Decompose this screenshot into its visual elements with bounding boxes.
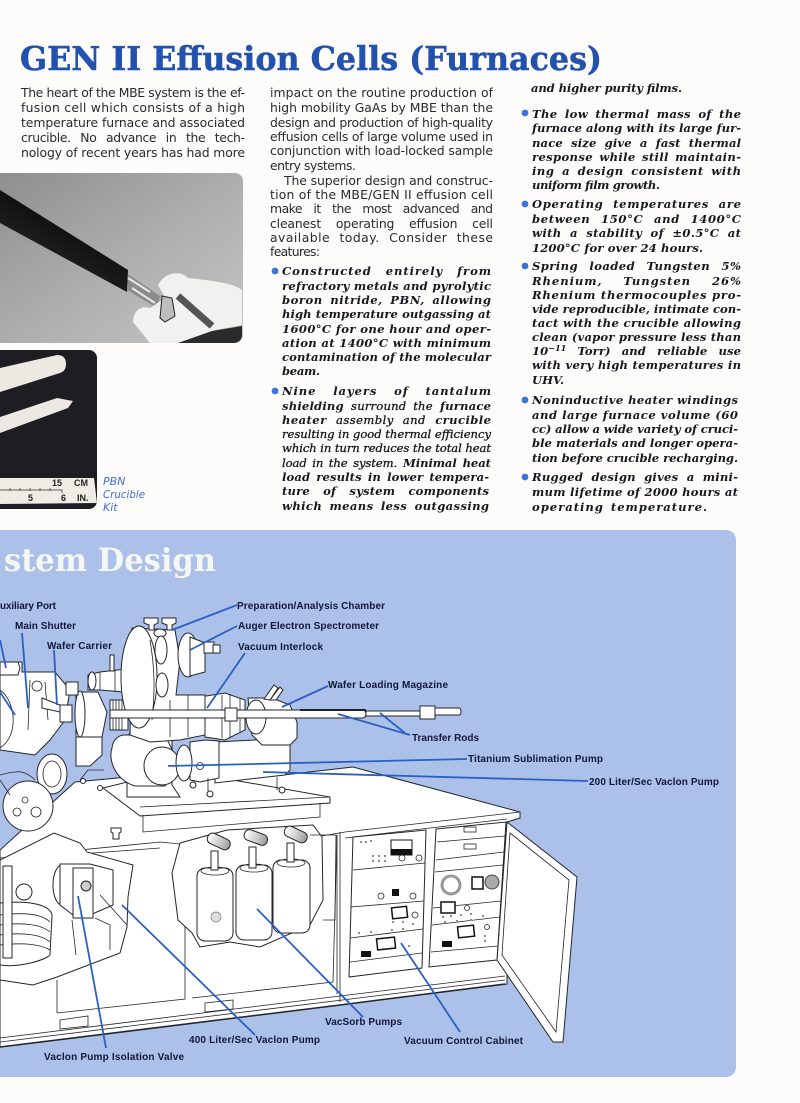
bullet list: column two features: boron nitride, PBN, allowing [282, 293, 491, 307]
text block: column two body: impact on the routine production of [270, 85, 494, 100]
text block: column two body: design and production of high-quality [270, 115, 493, 130]
bullet list: column three features: cc) allow a wide variety of cruci- [532, 422, 738, 436]
bullet list: column two features: load in the system. Minimal heat [282, 456, 492, 470]
interlock section [200, 693, 245, 740]
bullet list: column three features: Operating temperatures are [532, 197, 741, 211]
text block: column two body: The superior design and construc- [283, 173, 493, 188]
bullet list: column two features: load results in lower tempera- [282, 470, 489, 484]
preparation chamber disc [121, 618, 220, 742]
front access panels [57, 835, 337, 1029]
bullet list: column three features: clean (vapor pressure less than [532, 330, 741, 344]
bullet list: column three features: ble materials and longer opera- [532, 436, 738, 450]
text block: column two body: effusion cells of large volume used in [270, 129, 493, 144]
text block: column two body: cleanest operating effusion cell [270, 216, 493, 231]
photo: PBN crucibles with ruler: CM [74, 478, 88, 488]
bullet list: column two features: Constructed entirely from [282, 264, 491, 278]
text block: column two body: entry systems. [270, 158, 356, 173]
text block: introduction [20, 85, 245, 160]
bullet list: column two features: shielding surround the furnace [282, 399, 491, 413]
bullet list: column three features: tion before crucible recharging. [532, 451, 738, 465]
bullet list: column three features: and higher purity films. [531, 81, 682, 95]
bullet list: column three features: nace size give a fast thermal [532, 136, 742, 150]
bullet list: column three features: response while still maintain- [532, 150, 741, 164]
bullet list: column three features: Rugged design gives a mini- [531, 470, 738, 484]
bullet list: column two features: heater assembly and crucible [282, 413, 491, 427]
bullet list: column two features: refractory metals and pyrolytic [282, 279, 491, 293]
callout labels: Titanium Sublimation Pump [468, 754, 603, 765]
callout labels: 200 Liter/Sec Vaclon Pump [589, 777, 719, 788]
photo: PBN crucibles with ruler: 5 [28, 493, 33, 503]
caption: PBN Crucible Kit: PBN [103, 475, 125, 488]
caption: PBN Crucible Kit: Kit [103, 501, 118, 514]
callout labels: Wafer Loading Magazine [328, 680, 448, 691]
illustration: vacuum chambers [0, 618, 461, 832]
bullet list: column two features: ation at 1400°C with minimum [282, 336, 491, 350]
callout labels: 400 Liter/Sec Vaclon Pump [189, 1035, 320, 1046]
bullet list: column two features: high temperature outgassing at [282, 307, 492, 321]
callout labels: Vacuum Interlock [238, 642, 323, 653]
callout labels: Transfer Rods [412, 733, 479, 744]
text block: column two body: available today. Consider these [270, 230, 493, 245]
bullet list: column three features: Rhenium, Tungsten 26% [531, 274, 741, 288]
bullet list: column two features: beam. [282, 364, 320, 378]
callout leader lines [0, 605, 588, 1048]
photo: PBN crucibles with ruler [0, 350, 97, 509]
text block: column two body [270, 85, 494, 259]
callout labels: Vaclon Pump Isolation Valve [44, 1052, 184, 1063]
control panels [349, 822, 506, 977]
illustration: MBE system cabinet and table [0, 767, 577, 1047]
photo: PBN crucibles with ruler: 15 [52, 478, 62, 488]
text block: column two body: high mobility GaAs by MBE than the [270, 100, 493, 115]
ion and sublimation pump bodies [215, 738, 290, 783]
text block: introduction: The heart of the MBE system is the ef- [20, 85, 245, 100]
callout labels: Auger Electron Spectrometer [238, 621, 379, 632]
callout labels: Vacuum Control Cabinet [404, 1036, 524, 1047]
caption: PBN Crucible Kit: Crucible [103, 488, 145, 501]
bullet list: column three features: −11 [548, 343, 566, 353]
bullet list: column three features: 1200°C for over 24 hours. [532, 241, 703, 255]
text block: introduction: crucible. No advance in the tech- [21, 130, 245, 145]
text block: introduction: fusion cell which consists of a high [21, 100, 245, 115]
cutout with VacSorb pumps [172, 824, 336, 947]
photo: PBN crucibles with ruler: IN. [77, 493, 89, 503]
pedestal [125, 727, 180, 797]
text block: column two body: tion of the MBE/GEN II effusion cell [270, 187, 493, 202]
title: GEN II Effusion Cells (Furnaces) [20, 39, 602, 78]
callout labels: VacSorb Pumps [325, 1017, 402, 1028]
heading: System Design: stem Design [4, 541, 216, 579]
callout labels: Preparation/Analysis Chamber [237, 601, 385, 612]
base plate [103, 770, 330, 816]
bullet list: column three features: furnace along with its large fur- [531, 121, 741, 135]
text block: column two body: conjunction with load-locked sample [270, 143, 493, 158]
callout labels: uxiliary Port [0, 601, 57, 612]
bullet list: column three features: The low thermal mass of the [532, 107, 741, 121]
bullet list: column three features: Rhenium thermocouples pro- [531, 288, 741, 302]
bullet list: column three features: operating temperature. [532, 500, 707, 514]
bullet list: column two features: resulting in good thermal efficiency [282, 427, 491, 441]
bullet list: column three features: mum lifetime of 2000 hours at [532, 485, 739, 499]
bullet list: column three features: Torr) and reliable use [566, 344, 741, 358]
large wafer loading chamber [248, 698, 297, 745]
text block: introduction: temperature furnace and associated [21, 115, 245, 130]
photo: PBN crucibles with ruler: 6 [61, 493, 66, 503]
transfer rods [110, 706, 461, 721]
text block: introduction: nology of recent years has had more [21, 145, 245, 160]
flanges to the left of chamber [110, 700, 128, 730]
cutout with Vaclon pump [0, 833, 133, 985]
bullet list: column two features: which means less outgassing [282, 499, 489, 513]
bullet list: column three features: with very high temperatures in [532, 358, 741, 372]
bullet list: column three features: and large furnace volume (60 [532, 408, 738, 422]
bullet list: column three features: 10 [532, 344, 548, 358]
callout labels: Wafer Carrier [47, 641, 112, 652]
bullet list: column two features [272, 264, 492, 513]
bullet list: column three features: between 150°C and 1400°C [532, 212, 742, 226]
callout labels: Main Shutter [15, 621, 76, 632]
bullet list: column three features: with a stability of ±0.5°C at [532, 226, 742, 240]
bullet list: column three features: Spring loaded Tungsten 5% [532, 259, 741, 273]
bullet list: column three features: Noninductive heater windings [531, 393, 738, 407]
bullet list: column two features: ture of system components [282, 484, 489, 498]
door of cabinet [497, 822, 577, 1042]
bullet list: column three features: UHV. [532, 373, 564, 387]
bullet list: column three features: ing a design consistent with [532, 164, 741, 178]
bullet list: column two features: Nine layers of tantalum [281, 384, 491, 398]
knob on table [111, 828, 121, 839]
bullet list: column three features: uniform film growth. [532, 178, 660, 192]
text block: column two body: make it the most advanced and [270, 201, 493, 216]
bullet list: column three features [522, 81, 742, 514]
bullet list: column three features: tact with the crucible allowing [532, 316, 741, 330]
caption: PBN Crucible Kit [103, 475, 145, 514]
bullet list: column three features: vide reproducible, intimate con- [532, 302, 741, 316]
bullet list: column two features: which in turn reduces the total heat [282, 441, 491, 455]
text block: column two body: features: [270, 244, 320, 259]
callout labels [0, 601, 719, 1063]
main growth chamber [0, 662, 104, 831]
photo: furnace held in gloved hand [0, 173, 243, 343]
bullet list: column two features: contamination of the molecular [282, 350, 492, 364]
bullet list: column two features: 1600°C for one hour and oper- [282, 322, 491, 336]
